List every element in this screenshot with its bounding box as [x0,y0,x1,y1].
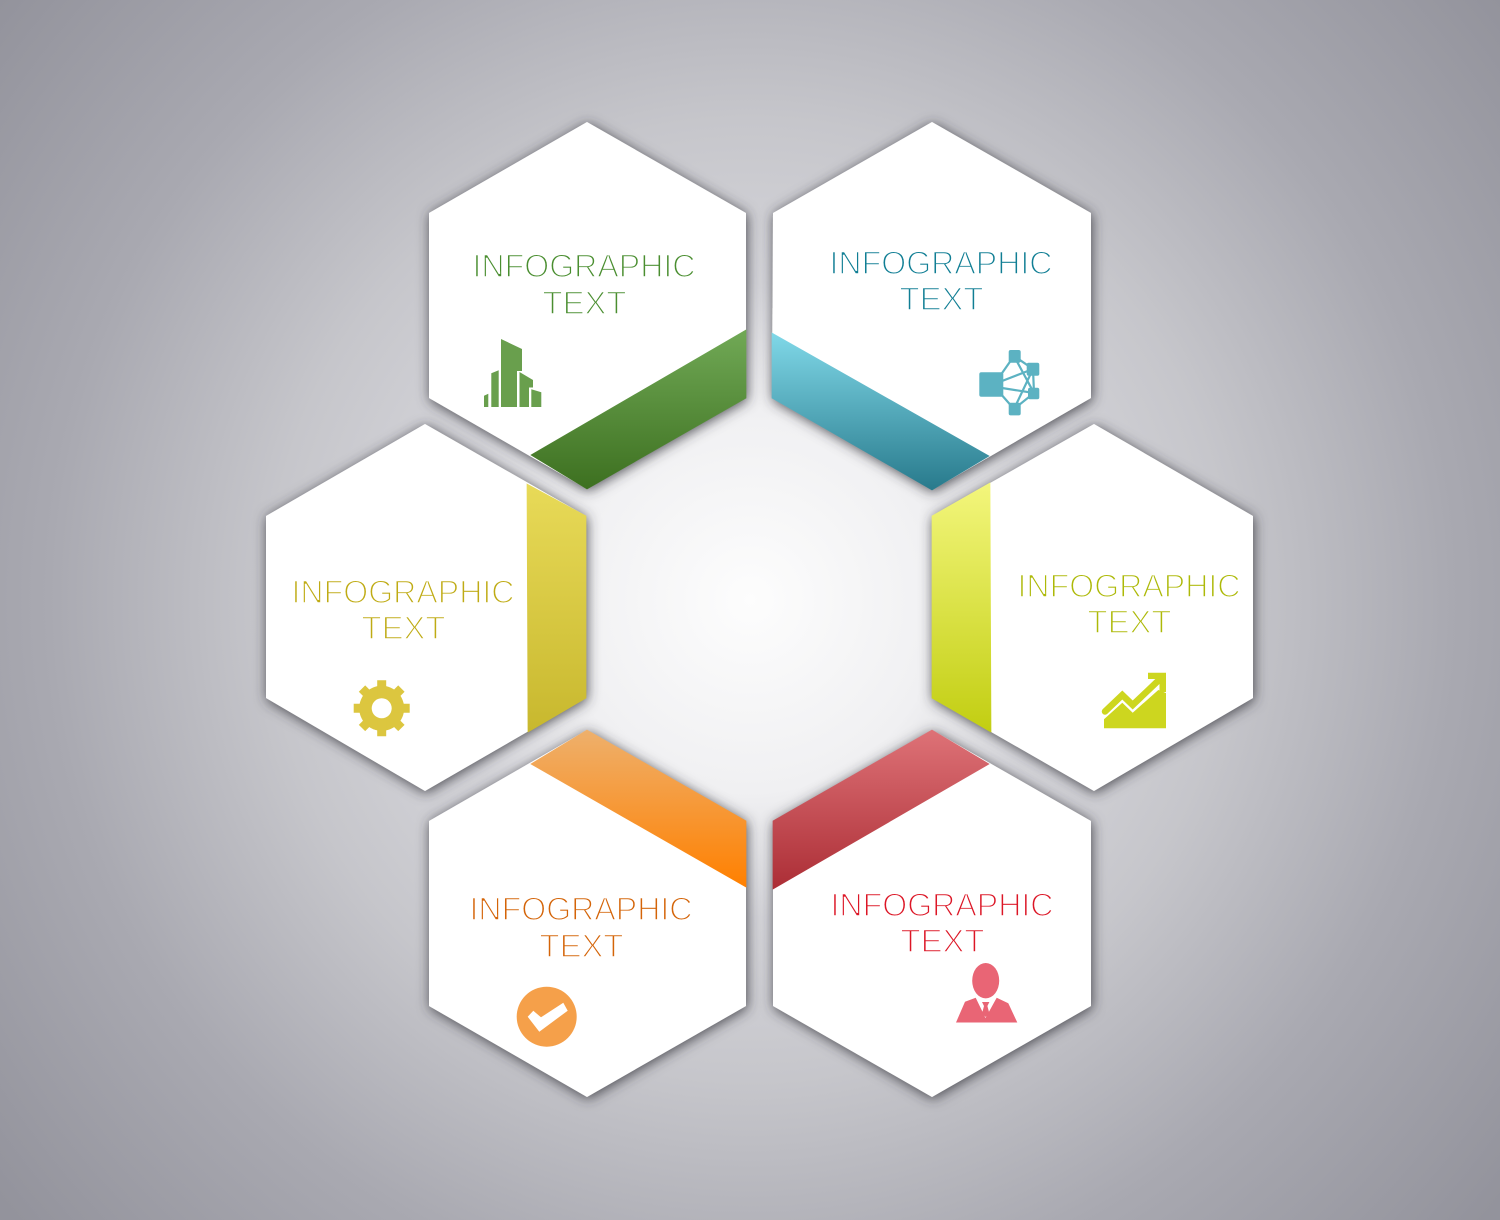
teal band [772,333,989,490]
heading: teal: TEXT [900,281,984,317]
heading: red: TEXT [900,923,984,959]
icon: network [979,350,1039,415]
green band [531,330,746,489]
heading: lime: TEXT [1088,604,1172,640]
panel: gold hexagon [266,424,586,791]
heading: orange [470,891,692,964]
panel: green hexagon [429,122,746,489]
heading: lime [1018,568,1240,640]
heading: gold: TEXT [362,610,446,646]
icon: person [956,963,1017,1022]
heading: green [472,248,696,321]
heading: green: INFOGRAPHIC [472,248,696,284]
icon: growth chart [1104,673,1166,728]
lime band [932,483,991,732]
panel: teal hexagon [772,122,1091,490]
heading: orange: INFOGRAPHIC [470,891,692,927]
icon: gear [354,680,410,736]
red band [773,730,989,889]
heading: gold [292,574,514,646]
panel: red hexagon [773,730,1091,1097]
gold band [527,484,586,732]
heading: teal [830,245,1052,317]
panel: lime hexagon [932,424,1253,791]
heading: red: INFOGRAPHIC [830,887,1054,923]
heading: orange: TEXT [540,928,624,964]
heading: red [830,887,1054,959]
heading: green: TEXT [542,285,626,321]
heading: gold: INFOGRAPHIC [292,574,514,610]
icon: buildings [484,339,541,407]
orange band [531,730,746,887]
icon: check badge [517,987,577,1047]
heading: lime: INFOGRAPHIC [1018,568,1240,604]
panel: orange hexagon [429,730,746,1097]
heading: teal: INFOGRAPHIC [830,245,1052,281]
